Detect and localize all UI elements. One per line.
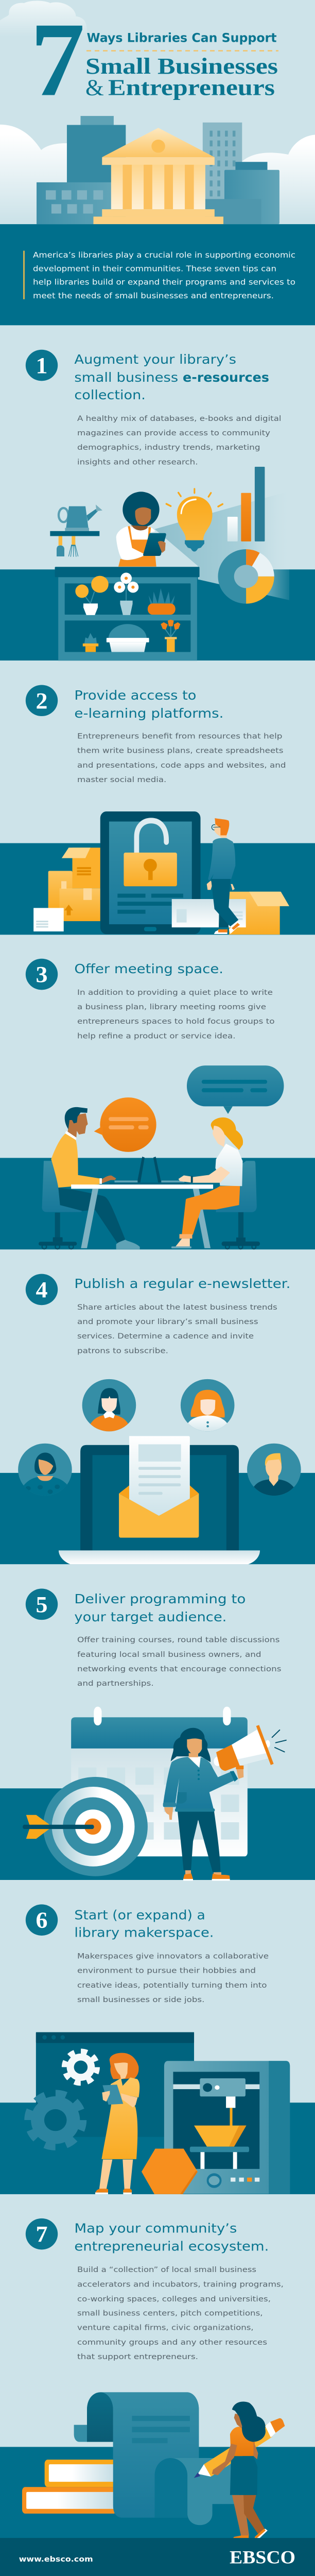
bowl planter [107, 624, 149, 653]
heading 1: e-resources [183, 370, 269, 385]
body text 4: Share articles about the latest business trends [77, 1303, 277, 1312]
number badge 6: 6 [36, 1907, 48, 1933]
cloud: top left [0, 1, 87, 37]
avatar: man blond [247, 1444, 301, 1498]
number badge 5 [26, 1589, 58, 1620]
avatar: woman short hair [18, 1444, 72, 1496]
meeting table [71, 1184, 213, 1248]
title line: & Entrepreneurs: & [85, 75, 104, 100]
body text 2: master social media. [77, 775, 166, 784]
illustration: calendar and target [23, 1707, 248, 1876]
heading 1: small business [74, 370, 178, 385]
band 2 [0, 843, 315, 935]
books [22, 2460, 117, 2514]
calendar [71, 1707, 248, 1856]
body text 2: and presentations, code apps and websites, and [77, 761, 286, 770]
building: low left [37, 182, 113, 224]
number badge 4: 4 [36, 1277, 48, 1302]
heading 2: e-learning platforms. [74, 706, 223, 721]
illustration: e-learning tablet [33, 811, 289, 935]
number badge 6 [26, 1904, 58, 1936]
boxes left [33, 848, 101, 931]
illustration: data and flower shop [155, 467, 289, 604]
light bulb [166, 489, 222, 552]
illustration: meeting table [94, 1065, 284, 1184]
figure: shopkeeper with tablet and watering can shelf [50, 492, 166, 567]
heading 1: Augment your library’s [74, 352, 236, 367]
body text 5: Offer training courses, round table discussions [77, 1636, 279, 1645]
number badge 1 [26, 350, 58, 381]
heading 6 [74, 1908, 214, 1941]
body text 4: patrons to subscribe. [77, 1346, 168, 1355]
number badge 3: 3 [36, 962, 48, 987]
intro text: development in their communities. These seven tips can [33, 264, 276, 273]
heading 6: library makerspace. [74, 1925, 214, 1941]
small plant [83, 633, 98, 652]
avatar: woman dark hair [82, 1379, 136, 1434]
body text 6: creative ideas, potentially turning them into [77, 1981, 267, 1990]
footer band [0, 2538, 315, 2576]
panel: tip 5 [0, 1589, 315, 1881]
number badge 3 [26, 959, 58, 990]
panel: tip 6 [0, 1904, 315, 2194]
body text 3: help refine a product or service idea. [77, 1032, 236, 1040]
body text 3: In addition to providing a quiet place to write [77, 988, 273, 997]
panel: tip 7 [0, 2218, 315, 2541]
illustration: scroll, books and woman with pencil [22, 2392, 285, 2541]
heading 1 [74, 352, 269, 403]
panel: tip 2 [0, 685, 315, 935]
intro accent bar [23, 251, 25, 299]
body text 6: Makerspaces give innovators a collaborative [77, 1952, 269, 1960]
watering can [59, 504, 102, 531]
number badge 7 [26, 2218, 58, 2249]
body text 5 [77, 1636, 281, 1688]
dashed rule [86, 50, 278, 52]
heading 5: Deliver programming to [74, 1591, 246, 1607]
tulips [161, 620, 180, 652]
heading 7 [74, 2221, 269, 2255]
heading 2 [74, 688, 223, 721]
figure: man with glasses walking [207, 818, 240, 934]
body text 4: services. Determine a cadence and invite [77, 1332, 254, 1341]
intro text: help libraries build or expand their programs and services to [33, 278, 295, 287]
heading 4: Publish a regular e-newsletter. [74, 1276, 290, 1292]
heading 5: your target audience. [74, 1609, 226, 1625]
building: tall left [67, 116, 126, 224]
heading 3: Offer meeting space. [74, 961, 223, 977]
band 4 [0, 1473, 315, 1564]
white flowers [114, 573, 138, 615]
3D printer [164, 2061, 290, 2194]
speech bubble: orange [94, 1097, 156, 1152]
body text 7: co-working spaces, colleges and universities, [77, 2295, 271, 2303]
body text 6 [77, 1952, 269, 2004]
building: block right [205, 162, 279, 224]
laptops [110, 1157, 190, 1184]
panel: tip 3 [0, 959, 315, 1249]
scroll [74, 2392, 239, 2525]
number badge 2: 2 [36, 688, 48, 714]
shelf with tools [50, 531, 99, 557]
body text 7: that support entrepreneurs. [77, 2352, 198, 2361]
intro band [0, 224, 315, 325]
library building [93, 128, 223, 224]
body text 7: small business centers, pitch competitions, [77, 2309, 263, 2318]
number badge 5: 5 [36, 1591, 48, 1617]
footer [0, 2538, 315, 2576]
skyline illustration [37, 116, 279, 224]
body text 1: magazines can provide access to community [77, 429, 270, 437]
body text 2: them write business plans, create spreadsheets [77, 747, 283, 755]
gear: dark [28, 2094, 82, 2146]
body text 7: Build a “collection” of local small business [77, 2265, 256, 2274]
panel: tip 1 [0, 350, 315, 660]
body text 1: insights and other research. [77, 458, 198, 466]
cloud: lower right [242, 135, 315, 224]
band 1 [0, 569, 315, 660]
intro text: America’s libraries play a crucial role in supporting economic [33, 250, 295, 260]
number badge 7: 7 [36, 2222, 48, 2247]
target [43, 1777, 148, 1876]
speech bubble: teal [187, 1065, 284, 1114]
grass planter [148, 588, 176, 615]
woman with pencil [194, 2402, 285, 2541]
building: tower right [203, 123, 242, 204]
laptop [59, 1445, 260, 1564]
envelope [119, 1436, 199, 1538]
logo wordmark EBSCO: EBSCO [230, 2547, 295, 2568]
figure: seated woman with chair [171, 1117, 260, 1249]
arrow [23, 1815, 94, 1839]
heading 6: Start (or expand) a [74, 1908, 205, 1923]
body text 1 [77, 414, 281, 466]
title line: & Entrepreneurs: Entrepreneurs [108, 75, 275, 100]
donut chart [218, 549, 274, 604]
browser window [36, 2032, 194, 2137]
orange flowers [75, 576, 109, 615]
body text 4 [77, 1303, 277, 1355]
open box right [229, 892, 289, 935]
body text 7: venture capital firms, civic organizations, [77, 2324, 254, 2332]
intro text [33, 250, 295, 300]
band 6 [0, 2103, 315, 2194]
body text 2: Entrepreneurs benefit from resources that help [77, 732, 282, 741]
body text 3: a business plan, library meeting rooms give [77, 1003, 266, 1011]
avatar: woman red hair [181, 1379, 234, 1434]
heading 1: collection. [74, 387, 146, 403]
hexagon block [142, 2149, 198, 2194]
body text 7: accelerators and incubators, training programs, [77, 2280, 284, 2289]
body text 5: featuring local small business owners, and [77, 1650, 261, 1659]
body text 5: and partnerships. [77, 1679, 154, 1688]
band 7 [0, 2447, 315, 2538]
tablet [100, 811, 201, 934]
title line: Small Businesses: Small Businesses [85, 53, 278, 79]
figure: woman with megaphone [163, 1725, 286, 1881]
title numeral 7: 7 [30, 1, 85, 118]
footer url: www.ebsco.com [19, 2555, 93, 2564]
body text 1: demographics, industry trends, marketing [77, 443, 260, 452]
intro text: meet the needs of small businesses and entrepreneurs. [33, 291, 274, 300]
number badge 2 [26, 685, 58, 716]
figure: seated man with chair [39, 1107, 140, 1249]
band 5 [0, 1788, 315, 1880]
body text 2 [77, 732, 286, 784]
illustration: makerspace [28, 2032, 290, 2194]
number badge 1: 1 [36, 353, 48, 378]
light beam [155, 491, 289, 600]
white cards [172, 899, 246, 927]
body text 7: community groups and any other resources [77, 2338, 267, 2347]
heading 2: Provide access to [74, 688, 196, 703]
panel: tip 4 [0, 1274, 315, 1564]
body text 6: small businesses or side jobs. [77, 1995, 204, 2004]
shelf unit with plants [55, 567, 200, 660]
body text 5: networking events that encourage connections [77, 1665, 281, 1673]
body text 7 [77, 2265, 284, 2361]
illustration: laptop newsletter [18, 1379, 301, 1564]
padlock [124, 821, 177, 886]
body text 1: A healthy mix of databases, e-books and digital [77, 414, 281, 423]
heading 5 [74, 1591, 246, 1625]
heading 7: Map your community’s [74, 2221, 237, 2236]
figure: woman with tablet [95, 2053, 139, 2194]
body text 4: and promote your library’s small business [77, 1317, 258, 1326]
band 3 [0, 1158, 315, 1249]
shopkeeper [116, 492, 166, 567]
panel: hero header [0, 1, 315, 325]
cloud: lower left [0, 125, 68, 224]
title line: Ways Libraries Can Support: Ways Libraries Can Support [86, 30, 277, 45]
body text 3 [77, 988, 275, 1040]
body text 3: entrepreneurs spaces to hold focus groups to [77, 1017, 275, 1026]
body text 6: environment to pursue their hobbies and [77, 1967, 256, 1975]
heading 7: entrepreneurial ecosystem. [74, 2239, 269, 2255]
bar chart [227, 467, 265, 541]
number badge 4 [26, 1274, 58, 1305]
gear: white [65, 2052, 97, 2083]
